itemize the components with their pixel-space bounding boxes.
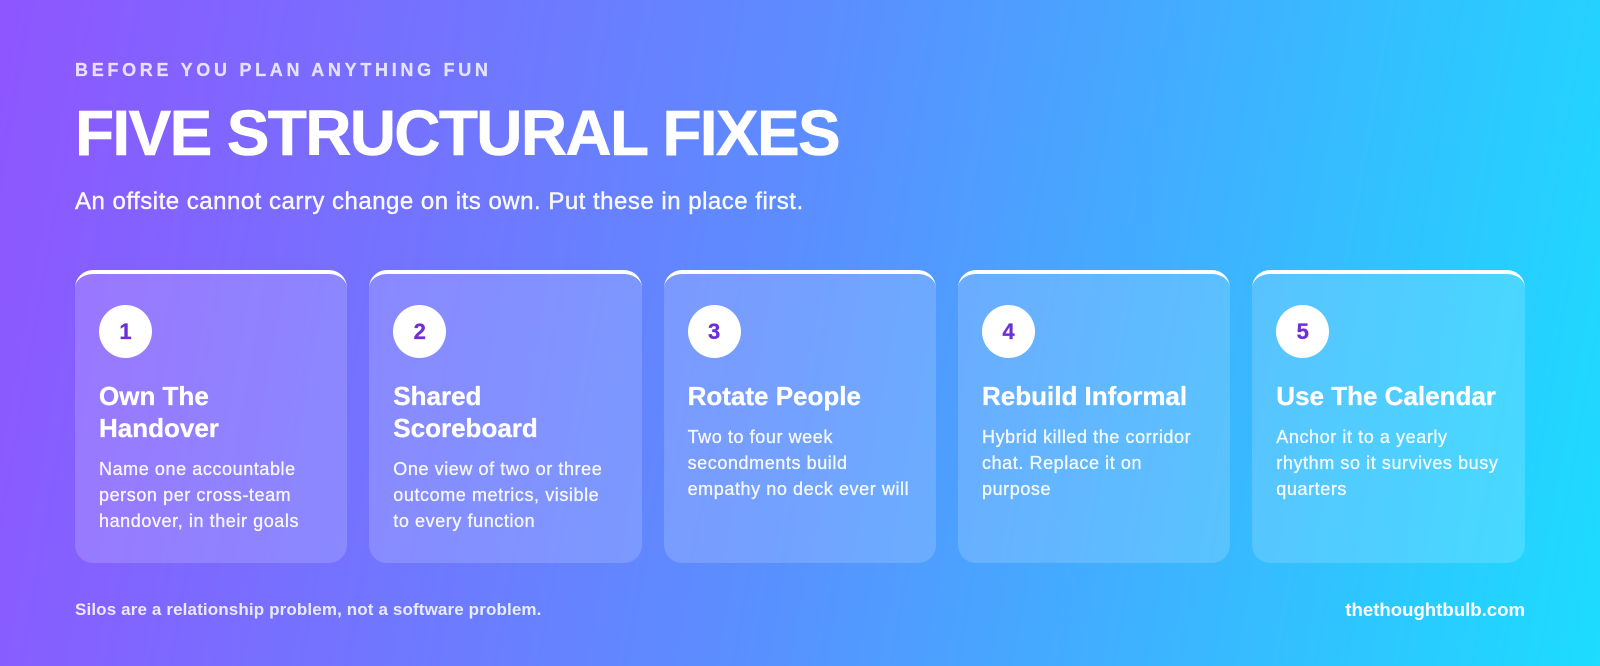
card 3 body bbox=[688, 426, 909, 500]
card 2 body: outcome metrics, visible bbox=[393, 484, 599, 504]
number badge 4: 4 bbox=[1002, 318, 1015, 344]
card 1 body: handover, in their goals bbox=[99, 510, 299, 530]
card 3 body: Two to four week bbox=[688, 426, 833, 446]
number badge 1 bbox=[99, 304, 152, 358]
number badge 5 bbox=[1276, 304, 1329, 358]
card 4 body: chat. Replace it on bbox=[982, 452, 1142, 472]
card 4 body bbox=[982, 426, 1191, 500]
card 1 heading bbox=[99, 380, 219, 442]
number badge 5: 5 bbox=[1297, 318, 1309, 344]
card 1 body: person per cross-team bbox=[99, 484, 291, 504]
card 2 body: One view of two or three bbox=[393, 458, 602, 478]
footer note: Silos are a relationship problem, not a software problem. bbox=[75, 600, 542, 619]
panel: card 1 bbox=[75, 270, 347, 563]
card 3 body: empathy no deck ever will bbox=[688, 478, 909, 498]
panel: card 4 bbox=[958, 270, 1230, 563]
card 2 body bbox=[393, 458, 602, 532]
card 5 body: Anchor it to a yearly bbox=[1276, 426, 1448, 446]
number badge 3: 3 bbox=[708, 318, 720, 344]
card 1 body: Name one accountable bbox=[99, 458, 296, 478]
number badge 1: 1 bbox=[119, 318, 132, 344]
card 1 body bbox=[99, 458, 299, 532]
card 5 heading: Use The Calendar bbox=[1276, 380, 1496, 410]
number badge 3 bbox=[688, 304, 741, 358]
panel: card 2 bbox=[369, 270, 642, 563]
card 4 heading: Rebuild Informal bbox=[982, 380, 1187, 410]
card 4 body: purpose bbox=[982, 478, 1051, 498]
subtitle: An offsite cannot carry change on its own. Put these in place first. bbox=[75, 188, 804, 215]
eyebrow: BEFORE YOU PLAN ANYTHING FUN bbox=[75, 60, 492, 80]
card 5 body bbox=[1276, 426, 1498, 500]
card 2 heading bbox=[393, 380, 538, 442]
card 2 body: to every function bbox=[393, 510, 535, 530]
number badge 2: 2 bbox=[414, 318, 426, 344]
card 1 heading: Own The bbox=[99, 380, 209, 410]
panel: card 5 bbox=[1252, 270, 1525, 563]
card 1 heading: Handover bbox=[99, 412, 219, 442]
number badge 2 bbox=[393, 304, 446, 358]
number badge 4 bbox=[982, 304, 1035, 358]
card 2 heading: Scoreboard bbox=[393, 412, 538, 442]
card 4 body: Hybrid killed the corridor bbox=[982, 426, 1191, 446]
footer website: thethoughtbulb.com bbox=[1345, 599, 1525, 620]
card 3 heading: Rotate People bbox=[688, 380, 861, 410]
card 5 body: quarters bbox=[1276, 478, 1347, 498]
card 5 body: rhythm so it survives busy bbox=[1276, 452, 1498, 472]
title: FIVE STRUCTURAL FIXES bbox=[75, 97, 839, 169]
card 2 heading: Shared bbox=[393, 380, 481, 410]
card 3 body: secondments build bbox=[688, 452, 848, 472]
panel: card 3 bbox=[664, 270, 936, 563]
